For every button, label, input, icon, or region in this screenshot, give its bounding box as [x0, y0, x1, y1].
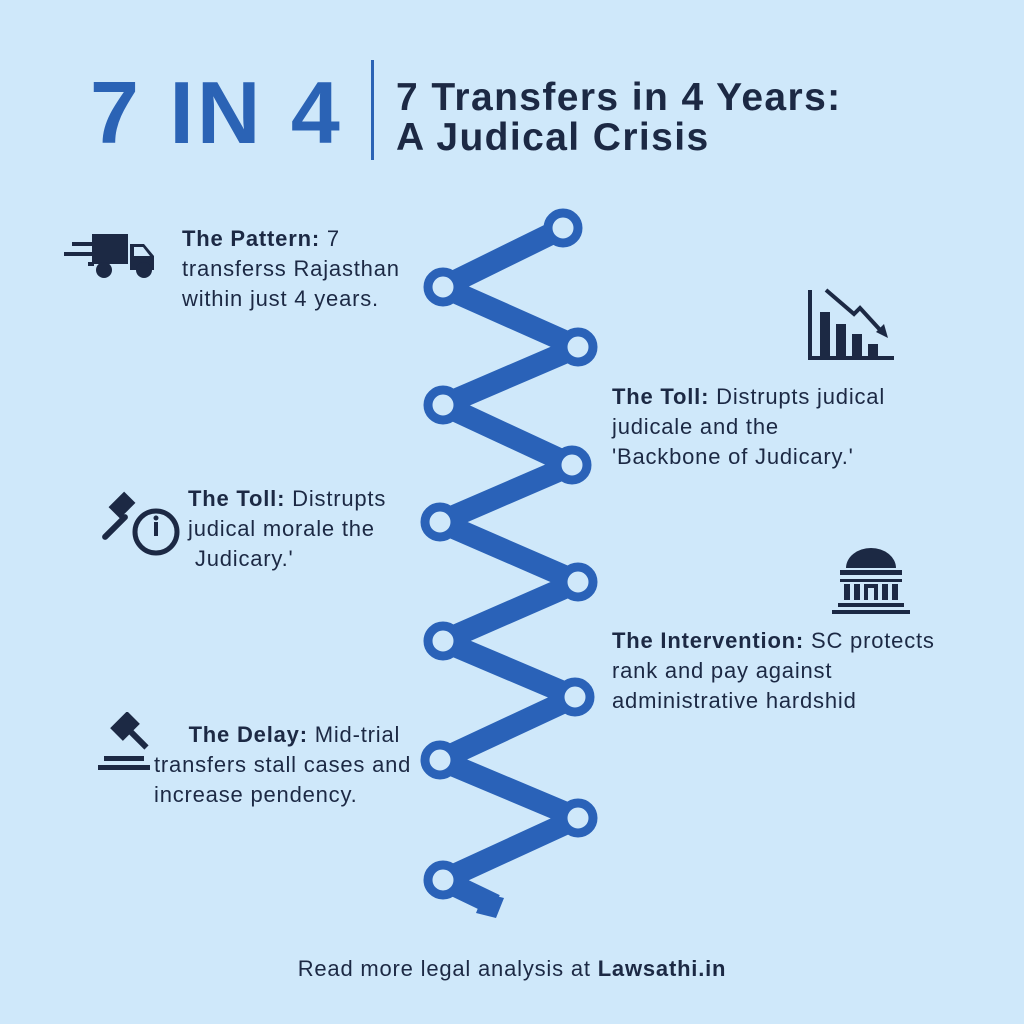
- text: The Delay: [154, 722, 411, 807]
- text: The Intervention: [612, 628, 935, 713]
- text: The Intervention: The Intervention: SC protects: [612, 628, 935, 653]
- icon: court building: [832, 548, 910, 614]
- text: The Intervention: administrative hardshid: [612, 688, 857, 713]
- text: The Pattern: [182, 226, 400, 311]
- text: The Toll right: [611, 384, 885, 469]
- icon: truck: [64, 234, 154, 278]
- text: The Toll right: The Toll: Distrupts judical: [612, 384, 885, 409]
- footer: Read more legal analysis at Lawsathi.in: [298, 956, 726, 981]
- text: The Toll left: Judicary.': [195, 546, 294, 571]
- title: subtitle: 7 Transfers in 4 Years:: [396, 76, 842, 119]
- text: The Pattern: within just 4 years.: [182, 286, 379, 311]
- text: The Toll left: [187, 486, 386, 571]
- text: The Pattern: The Pattern: 7: [182, 226, 340, 251]
- text: The Intervention: rank and pay against: [612, 658, 832, 683]
- icon: chart: [808, 288, 894, 360]
- divider: [371, 60, 374, 160]
- text: The Delay: The Delay: Mid-trial: [189, 722, 400, 747]
- text: The Toll right: 'Backbone of Judicary.': [612, 444, 854, 469]
- icon: gavel clock: [102, 492, 180, 556]
- text: The Delay: increase pendency.: [154, 782, 358, 807]
- text: The Toll left: The Toll: Distrupts: [188, 486, 386, 511]
- text: The Toll right: judicale and the: [612, 414, 779, 439]
- title: subtitle: A Judical Crisis: [396, 116, 710, 159]
- text: The Delay: transfers stall cases and: [154, 752, 411, 777]
- title: subtitle: [396, 76, 842, 159]
- text: The Toll left: judical morale the: [188, 516, 375, 541]
- title: 7 IN 4: 7 IN 4: [90, 63, 343, 162]
- text: The Pattern: transferss Rajasthan: [182, 256, 400, 281]
- icon: gavel: [98, 712, 150, 770]
